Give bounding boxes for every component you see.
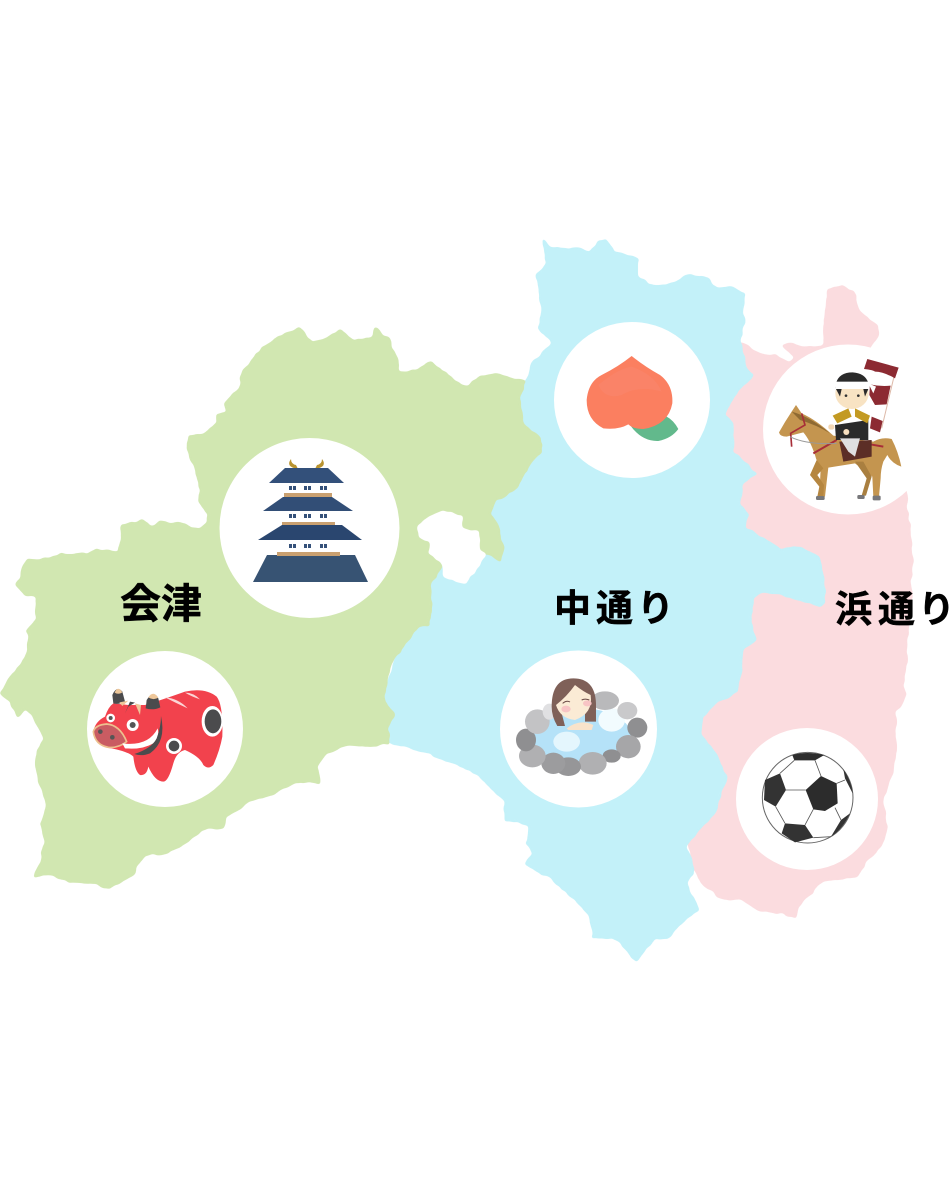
icon: akabeko red cow [87,651,243,807]
lake Inawashiro [417,511,486,583]
region: Nakadori (blue) [380,239,825,961]
icon: peach [554,322,710,478]
label: Nakadori: 中通り [554,588,674,629]
icon: soccer ball [736,728,878,870]
banner [882,368,896,428]
label: Aizu: 会津 [120,581,202,627]
icon: samurai on horseback [763,344,933,514]
region: Aizu (green) [0,327,542,888]
region: Hamadori (pink) [680,286,912,919]
icon: woman in hot spring [500,650,657,808]
icon: castle [220,438,400,618]
